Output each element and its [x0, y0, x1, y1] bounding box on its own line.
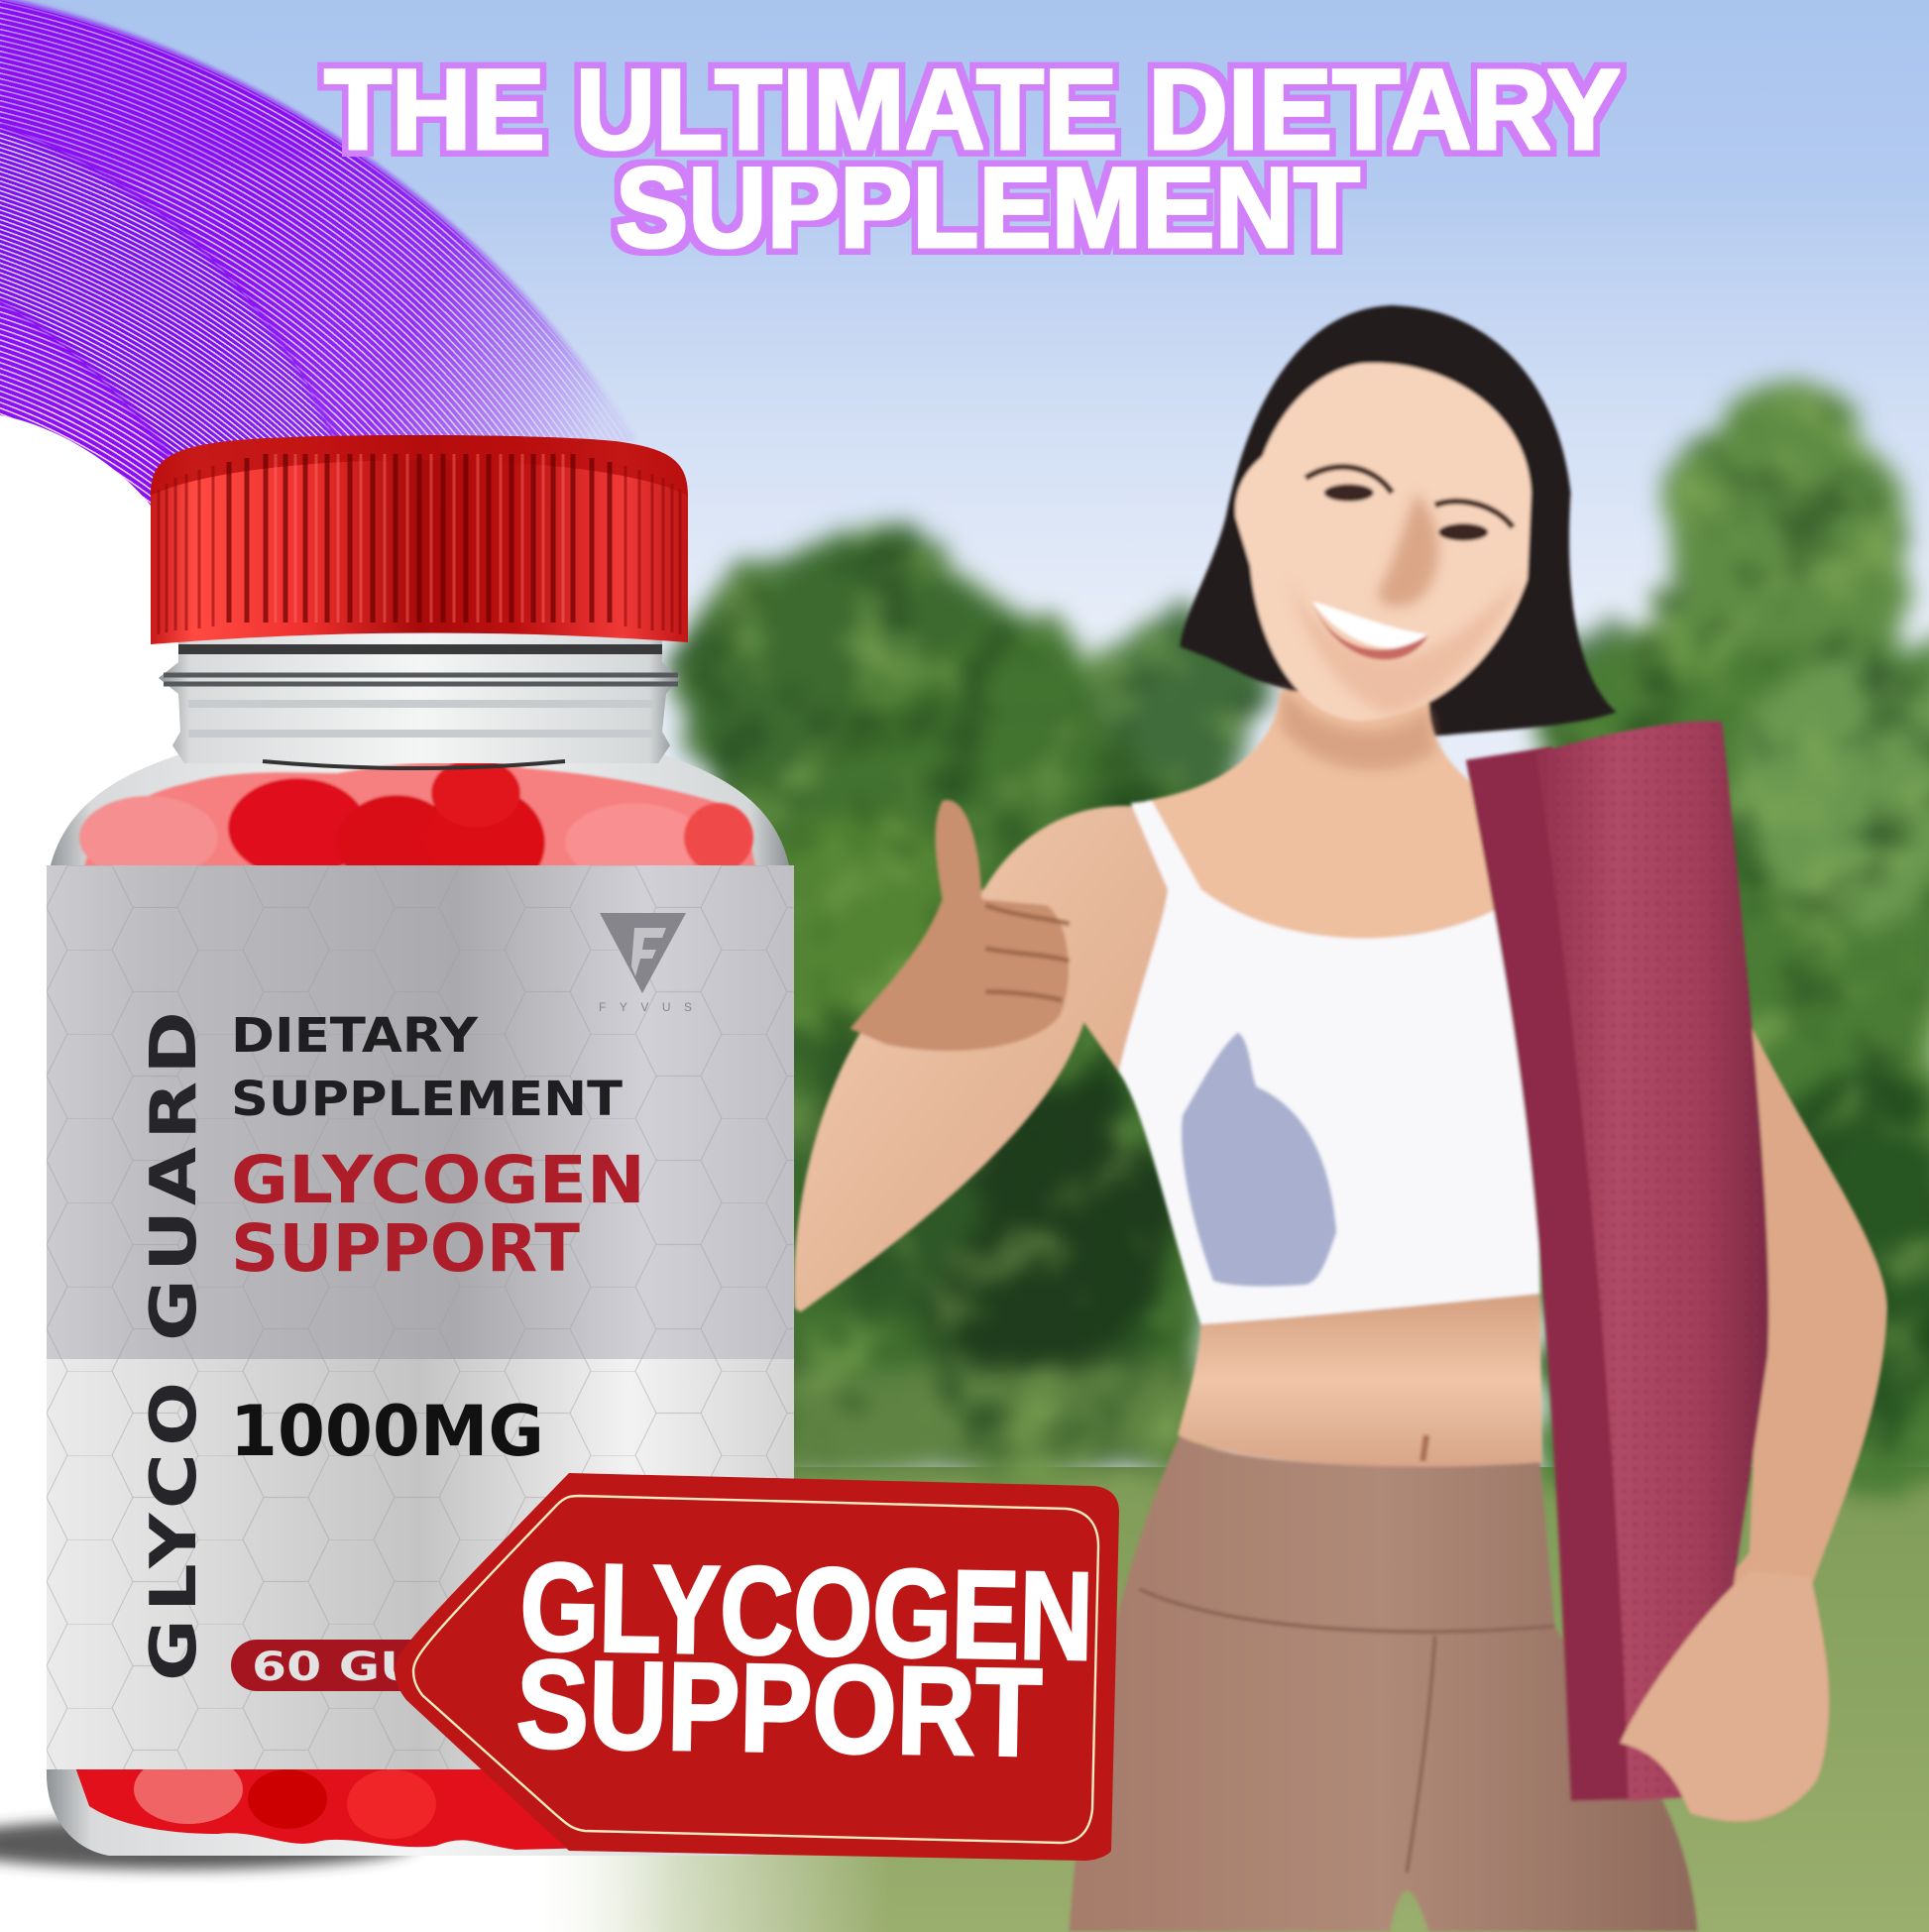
- ribbon edges: [0, 0, 634, 466]
- neck glass: [159, 634, 680, 768]
- dietary supplement text: SUPPLEMENT: [231, 1072, 623, 1127]
- shadow under bottle: [0, 1818, 416, 1870]
- face: [1235, 363, 1532, 721]
- count pill: [231, 1640, 489, 1691]
- mat flap: [1466, 746, 1663, 1801]
- neck shadow: [1281, 684, 1435, 769]
- dietary supplement text: DIETARY: [231, 1008, 479, 1064]
- ribbon 1: [0, 0, 634, 441]
- navel: [1422, 1435, 1426, 1461]
- ribbon 3: [0, 301, 176, 506]
- hair back: [1181, 305, 1616, 737]
- pants seams: [1139, 1589, 1554, 1873]
- dense top shading: [0, 0, 317, 178]
- tank top: [1118, 801, 1539, 1324]
- glycogen support text: SUPPORT: [231, 1210, 580, 1287]
- woman holding yoga mat: [794, 305, 1887, 1932]
- glycogen support badge: [395, 1473, 1119, 1861]
- badge text: GLYCOGEN: [518, 1536, 1094, 1686]
- dietary supplement text: [231, 1008, 623, 1127]
- mat roll: [1536, 721, 1768, 1801]
- label grey band: [47, 865, 794, 1359]
- cap ribs: [159, 454, 680, 634]
- white fade left of bottle: [0, 406, 892, 1932]
- mat texture: [1536, 721, 1768, 1801]
- label white band: [47, 1359, 794, 1769]
- vertical brand name: GLYCO GUARD: [138, 1004, 211, 1681]
- glycogen support text: GLYCOGEN: [231, 1142, 645, 1218]
- brand logo: FYVUS: [599, 1000, 692, 1014]
- title line 2: SUPPLEMENT: [616, 145, 1360, 272]
- pants: [1070, 1435, 1697, 1932]
- badge shape: [395, 1473, 1119, 1861]
- gummies top: [79, 758, 755, 897]
- title line 1: THE ULTIMATE DIETARY: [324, 47, 1621, 173]
- red cap: [151, 435, 688, 644]
- brand logo: [599, 913, 692, 1014]
- glass body: [47, 751, 794, 1856]
- neck and chest: [1146, 690, 1501, 939]
- belly: [1178, 1294, 1542, 1466]
- title: [324, 47, 1621, 272]
- badge text: [515, 1536, 1094, 1783]
- ribbon 2: [0, 125, 335, 466]
- badge text: SUPPORT: [515, 1634, 1043, 1782]
- badge inner outline: [413, 1496, 1098, 1843]
- upper arm and shoulder: [794, 806, 1171, 1311]
- count pill: 60 GU: [252, 1645, 420, 1690]
- glycogen support text: [231, 1142, 645, 1287]
- near hand: [1620, 1570, 1828, 1820]
- fist with thumb: [850, 800, 1070, 1051]
- facial features: [1288, 467, 1522, 715]
- purple curved line ribbons: [0, 0, 634, 555]
- far arm: [1624, 1022, 1887, 1822]
- cap top rim: [151, 435, 688, 496]
- supplement bottle: [47, 435, 794, 1856]
- shirt shadow: [1182, 1032, 1336, 1287]
- dosage: 1000MG: [230, 1391, 544, 1472]
- gummies bottom: [74, 1755, 753, 1850]
- hexagon label pattern: [47, 865, 794, 1769]
